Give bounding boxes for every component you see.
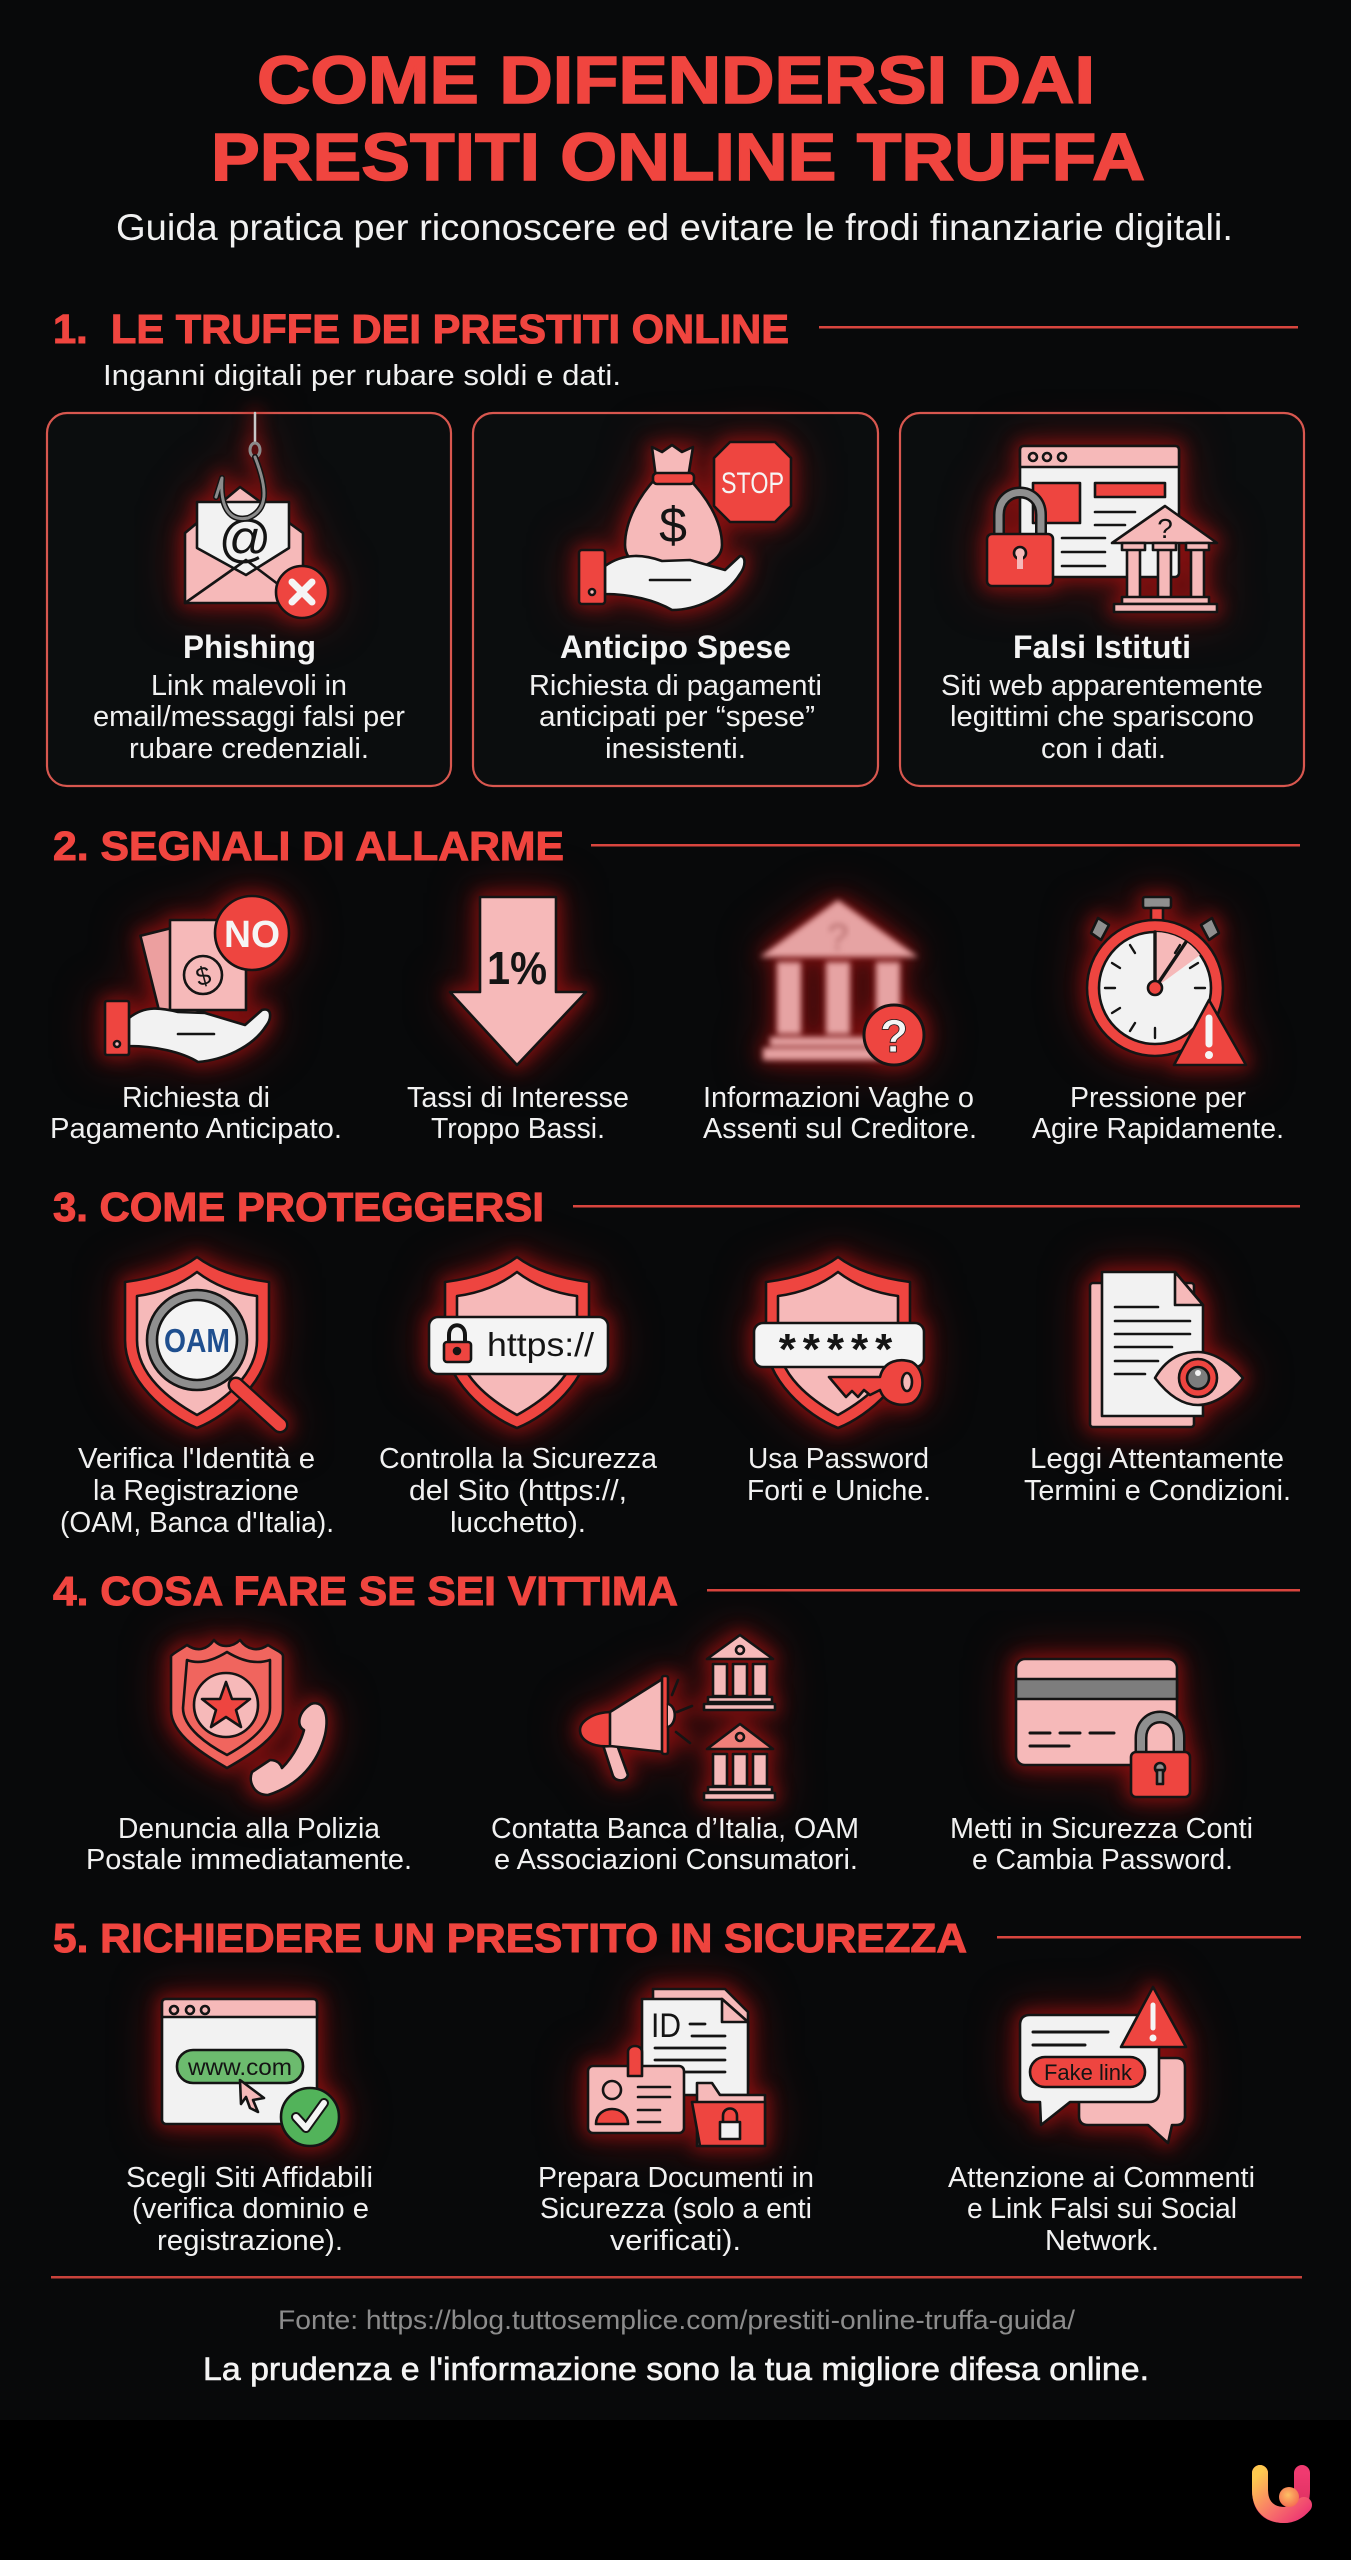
heading: phishing: Phishing [183,629,316,665]
item: controlla sicurezza sito [379,1257,658,1539]
icon: browser with green address bar and check [162,1999,339,2146]
label: (OAM, Banca d'Italia). [60,1507,334,1539]
text: falsi istituti description: con i dati. [1041,733,1166,765]
icon: police badge and telephone [171,1640,327,1795]
label: Network. [1045,2225,1159,2257]
label: Denuncia alla Polizia [118,1813,381,1845]
text: anticipo spese description [529,670,822,765]
label: lucchetto). [450,1507,586,1539]
item: richiesta di pagamento anticipato [50,896,342,1145]
label: del Sito (https://, [409,1475,627,1507]
text: anticipo spese description: inesistenti. [605,733,746,765]
icon: megaphone and two banks [580,1635,775,1800]
label: Postale immediatamente. [86,1844,412,1876]
icon: blurred bank with question mark: ? [827,917,849,959]
icon: phishing envelope and hook: @ [219,510,271,568]
icon: money bag, hand and stop sign [579,442,791,610]
label: la Registrazione [93,1475,299,1507]
label: e Link Falsi sui Social [967,2193,1237,2225]
label [126,2162,373,2257]
label: (verifica dominio e [132,2193,369,2225]
label [60,1443,334,1539]
label [747,1443,931,1507]
icon: brand logo [1260,2473,1304,2515]
icon: money bag, hand and stop sign: STOP [721,467,784,500]
section heading 1: 1. LE TRUFFE DEI PRESTITI ONLINE [53,306,789,352]
icon: cash in hand with NO badge [105,896,289,1062]
item: scegli siti affidabili [126,1999,373,2257]
item: password forti [747,1257,931,1507]
title: PRESTITI ONLINE TRUFFA [211,120,1145,195]
icon: credit card with padlock [1016,1659,1190,1797]
label [86,1813,412,1876]
icon: stopwatch with warning [1087,897,1246,1065]
label: Forti e Uniche. [747,1475,931,1507]
icon: fake website, padlock and bank: ? [1157,513,1173,544]
label: Leggi Attentamente [1030,1443,1284,1475]
label: registrazione). [157,2225,343,2257]
label: Pressione per [1070,1082,1246,1114]
label: e Cambia Password. [972,1844,1233,1876]
label: Controlla la Sicurezza [379,1443,658,1475]
label: Termini e Condizioni. [1024,1475,1291,1507]
title: COME DIFENDERSI DAI [257,43,1095,118]
label: Sicurezza (solo a enti [540,2193,812,2225]
item: denuncia polizia postale [86,1640,412,1876]
label: verificati). [610,2225,741,2257]
item: attenzione ai commenti [948,1987,1255,2257]
icon: ID documents, badge and locked folder: ID [651,2007,681,2045]
label: Attenzione ai Commenti [948,2162,1255,2194]
item: verifica identita [60,1257,334,1539]
label: e Associazioni Consumatori. [494,1844,858,1876]
item: prepara documenti [538,1989,814,2257]
closing statement: La prudenza e l'informazione sono la tua migliore difesa online. [203,2351,1149,2387]
icon: phishing envelope and hook [185,413,328,618]
label [407,1082,629,1145]
icon: fake website, padlock and bank [987,446,1217,612]
label [491,1813,859,1876]
icon: chat bubbles with fake link and warning: Fake link [1044,2060,1133,2085]
heading: anticipo spese: Anticipo Spese [560,629,791,665]
item: metti in sicurezza conti [950,1659,1253,1876]
icon: shield with https bar [429,1257,608,1428]
label [538,2162,814,2257]
panel: anticipo spese [473,413,878,786]
label: Assenti sul Creditore. [703,1113,977,1145]
label: Richiesta di [122,1082,270,1114]
label [1032,1082,1284,1145]
label [950,1813,1253,1876]
label: Metti in Sicurezza Conti [950,1813,1253,1845]
panel: falsi istituti [900,413,1304,786]
label: Tassi di Interesse [407,1082,629,1114]
icon: shield with password field and key: ***** [779,1325,899,1374]
icon: ID documents, badge and locked folder [588,1989,765,2146]
text: phishing description [93,670,405,765]
label: Contatta Banca d’Italia, OAM [491,1813,859,1845]
text: phishing description: email/messaggi falsi per [93,701,405,733]
section heading 4: 4. COSA FARE SE SEI VITTIMA [53,1568,678,1614]
label: Scegli Siti Affidabili [126,2162,373,2194]
panel: phishing [47,413,451,786]
icon: blurred bank with question mark [760,900,924,1065]
label [379,1443,658,1539]
label [50,1082,342,1145]
label: Prepara Documenti in [538,2162,814,2194]
label: Pagamento Anticipato. [50,1113,342,1145]
icon: shield with password field and key [754,1257,924,1428]
text: anticipo spese description: Richiesta di pagamenti [529,670,822,702]
text: falsi istituti description: legittimi che spariscono [950,701,1254,733]
icon: shield with OAM magnifier [125,1257,280,1428]
heading: falsi istituti: Falsi Istituti [1013,629,1191,665]
item: leggi termini [1024,1272,1291,1507]
item: contatta banca d'italia [491,1635,859,1876]
icon: document with eye [1090,1272,1243,1427]
section heading 2: 2. SEGNALI DI ALLARME [53,823,564,869]
label [703,1082,977,1145]
icon: chat bubbles with fake link and warning [1020,1987,1186,2143]
section heading 3: 3. COME PROTEGGERSI [53,1184,544,1230]
item: tassi troppo bassi [407,897,629,1145]
label: Verifica l'Identità e [78,1443,315,1475]
label [1024,1443,1291,1507]
icon: money bag, hand and stop sign: $ [659,497,687,553]
label: Usa Password [748,1443,929,1475]
section heading 5: 5. RICHIEDERE UN PRESTITO IN SICUREZZA [53,1915,967,1961]
subtitle: Guida pratica per riconoscere ed evitare le frodi finanziarie digitali. [116,207,1233,248]
label: Agire Rapidamente. [1032,1113,1284,1145]
label: Informazioni Vaghe o [703,1082,974,1114]
icon: down arrow with 1% [450,897,586,1065]
title [211,43,1145,195]
icon: browser with green address bar and check: www.com [187,2054,292,2080]
icon: shield with OAM magnifier: OAM [164,1322,230,1359]
text: phishing description: Link malevoli in [151,670,347,702]
section 1 intro: Inganni digitali per rubare soldi e dati. [103,360,621,392]
text: phishing description: rubare credenziali. [129,733,369,765]
icon: down arrow with 1%: 1% [487,942,547,994]
text: falsi istituti description: Siti web apparentemente [941,670,1263,702]
label [948,2162,1255,2257]
text: anticipo spese description: anticipati per “spese” [539,701,815,733]
icon: shield with https bar: https:// [487,1326,595,1363]
icon: cash in hand with NO badge: NO [224,914,280,956]
icon: cash in hand with NO badge: $ [192,959,215,992]
text: falsi istituti description [941,670,1263,765]
item: pressione per agire [1032,897,1284,1145]
source line: Fonte: https://blog.tuttosemplice.com/prestiti-online-truffa-guida/ [278,2305,1076,2335]
icon: blurred bank with question mark: ? [880,1010,908,1062]
item: informazioni vaghe [703,900,977,1145]
label: Troppo Bassi. [431,1113,605,1145]
